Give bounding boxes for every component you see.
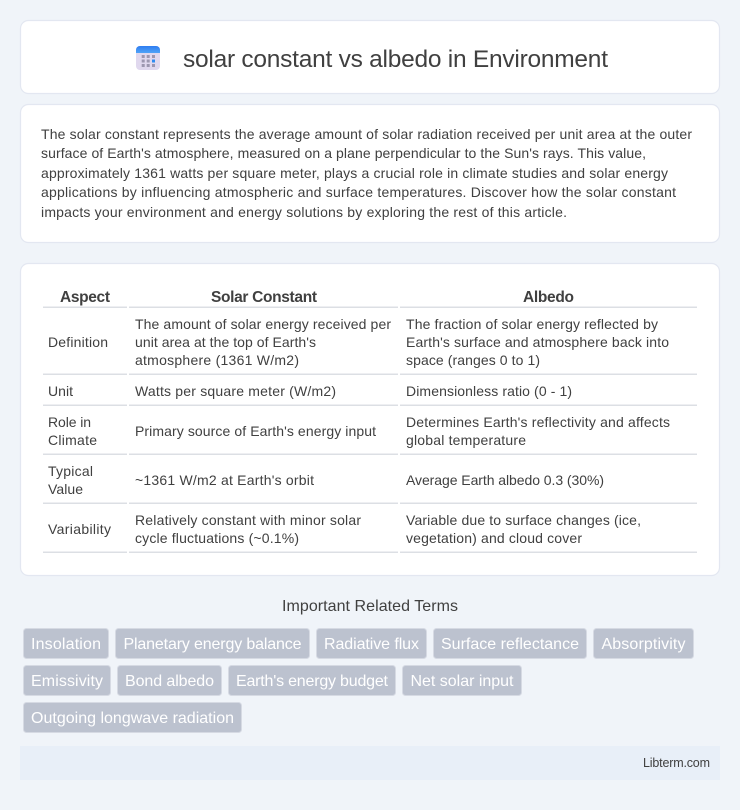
row: variability: Relatively constant with minor solar	[135, 512, 361, 528]
row: role in climate: Climate	[48, 432, 97, 448]
tag: Earth's energy budget: Earth's energy budget	[236, 673, 389, 690]
tag: Absorptivity	[594, 628, 694, 658]
row: unit: Unit	[48, 383, 73, 399]
row: typical value: ~1361 W/m2 at Earth's orbit	[135, 472, 314, 488]
table header: Solar Constant	[211, 289, 317, 306]
intro paragraph: impacts your environment and energy solutions by exploring the rest of this article.	[41, 204, 567, 220]
row: definition	[48, 316, 669, 368]
footer source: Libterm.com	[643, 756, 710, 770]
tag: Outgoing longwave radiation: Outgoing longwave radiation	[31, 710, 234, 727]
tag: Emissivity	[24, 666, 110, 696]
title: solar constant vs albedo in Environment	[183, 46, 608, 73]
table header: Albedo	[523, 289, 574, 306]
tag: Absorptivity: Absorptivity	[602, 636, 686, 653]
row: typical value: Value	[48, 481, 83, 497]
row: definition: space (ranges 0 to 1)	[406, 352, 540, 368]
row: typical value: Average Earth albedo 0.3 (30%)	[406, 472, 604, 488]
row: definition: atmosphere (1361 W/m2)	[135, 352, 299, 368]
row: variability	[48, 512, 641, 546]
tag: Bond albedo: Bond albedo	[125, 673, 214, 690]
intro paragraph: surface of Earth's atmosphere, measured on a plane perpendicular to the Sun's rays. This value,	[41, 145, 646, 161]
row: variability: vegetation) and cloud cover	[406, 530, 582, 546]
row: definition: Definition	[48, 334, 108, 350]
tag: Bond albedo	[118, 666, 222, 696]
header card	[20, 20, 720, 94]
tag: Insolation	[24, 628, 108, 658]
row: variability: Variable due to surface changes (ice,	[406, 512, 641, 528]
row: definition: unit area at the top of Earth's	[135, 334, 316, 350]
tag: Net solar input	[402, 666, 522, 696]
tag: Radiative flux	[316, 628, 426, 658]
row: unit	[48, 383, 572, 399]
row: typical value: Typical	[48, 463, 93, 479]
icon: calendar grid	[136, 46, 160, 70]
tag: Outgoing longwave radiation	[24, 702, 242, 732]
row: role in climate: Determines Earth's reflectivity and affects	[406, 414, 670, 430]
panel: introduction	[20, 104, 720, 242]
row: typical value	[48, 463, 604, 497]
tag: Surface reflectance	[434, 628, 586, 658]
row: unit: Watts per square meter (W/m2)	[135, 383, 336, 399]
tag: Earth's energy budget	[228, 666, 396, 696]
tag: Radiative flux: Radiative flux	[324, 636, 419, 653]
table header: Aspect	[60, 289, 110, 306]
intro paragraph: The solar constant represents the average amount of solar radiation received per unit area at the outer	[41, 126, 692, 142]
tag: Insolation: Insolation	[31, 636, 101, 653]
intro paragraph	[41, 126, 692, 220]
related term tags	[24, 628, 694, 732]
row: role in climate	[48, 414, 670, 448]
tag: Planetary energy balance: Planetary energy balance	[124, 636, 302, 653]
row: definition: The amount of solar energy received per	[135, 316, 391, 332]
footer bar	[20, 746, 720, 780]
intro paragraph: approximately 1361 watts per square meter, plays a crucial role in climate studies and solar energy	[41, 165, 668, 181]
row: role in climate: Role in	[48, 414, 91, 430]
related terms heading: Important Related Terms	[282, 598, 458, 615]
row: unit: Dimensionless ratio (0 - 1)	[406, 383, 572, 399]
tag: Surface reflectance: Surface reflectance	[441, 636, 579, 653]
intro paragraph: applications by influencing atmospheric and surface temperatures. Discover how the solar constant	[41, 184, 676, 200]
row: role in climate: Primary source of Earth's energy input	[135, 423, 376, 439]
row: variability: cycle fluctuations (~0.1%)	[135, 530, 299, 546]
table header	[60, 289, 574, 306]
panel: comparison table	[20, 264, 720, 576]
tag: Emissivity: Emissivity	[31, 673, 103, 690]
row: role in climate: global temperature	[406, 432, 526, 448]
tag: Net solar input: Net solar input	[410, 673, 514, 690]
row: variability: Variability	[48, 521, 111, 537]
row: definition: The fraction of solar energy reflected by	[406, 316, 658, 332]
row: definition: Earth's surface and atmosphere back into	[406, 334, 669, 350]
tag: Planetary energy balance	[116, 628, 310, 658]
